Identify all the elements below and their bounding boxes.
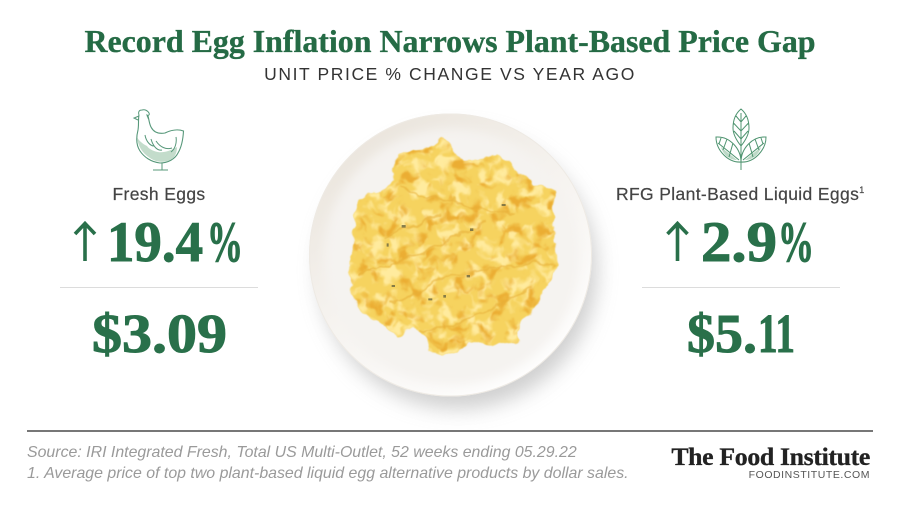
arrow up [668,224,688,261]
panel: plant-based liquid eggs [616,108,864,364]
change value: 19.4 [107,211,203,274]
source notes: Source: IRI Integrated Fresh, Total US Multi-Outlet, 52 weeks ending 05.29.22 [27,444,577,461]
label: plant-based liquid eggs: RFG Plant-Based Liquid Eggs1 [616,184,864,204]
change: fresh eggs [74,211,243,274]
price: plant-based [687,303,795,364]
panel: fresh eggs [60,109,258,364]
subtitle: UNIT PRICE % CHANGE VS YEAR AGO [264,64,636,84]
logo wordmark: The Food Institute [671,442,870,471]
footer rule [27,430,873,432]
change value: 2.9 [701,211,777,274]
source notes: 1. Average price of top two plant-based liquid egg alternative products by dollar sales. [27,464,629,482]
price: fresh eggs: $3.09 [92,303,227,364]
icon: plate of scrambled eggs [309,114,606,418]
label: fresh eggs: Fresh Eggs [112,184,206,204]
icon: chicken [133,109,184,170]
title: Record Egg Inflation Narrows Plant-Based Price Gap [84,24,816,59]
source notes [27,444,629,482]
plate well [324,129,580,385]
logo: The Food Institute [671,442,870,481]
price: plant-based: 11 [758,303,795,364]
divider [60,287,258,288]
scrambled eggs [347,137,558,355]
price: plant-based: $5. [687,303,757,364]
logo url: FOODINSTITUTE.COM [749,469,870,481]
change value: % [778,211,814,274]
change value: % [207,211,243,274]
change: plant-based [666,211,814,274]
icon: plant leaves [716,108,766,170]
arrow up [75,224,95,261]
plate [309,114,592,396]
plate shadow [319,131,597,409]
divider [642,287,840,288]
